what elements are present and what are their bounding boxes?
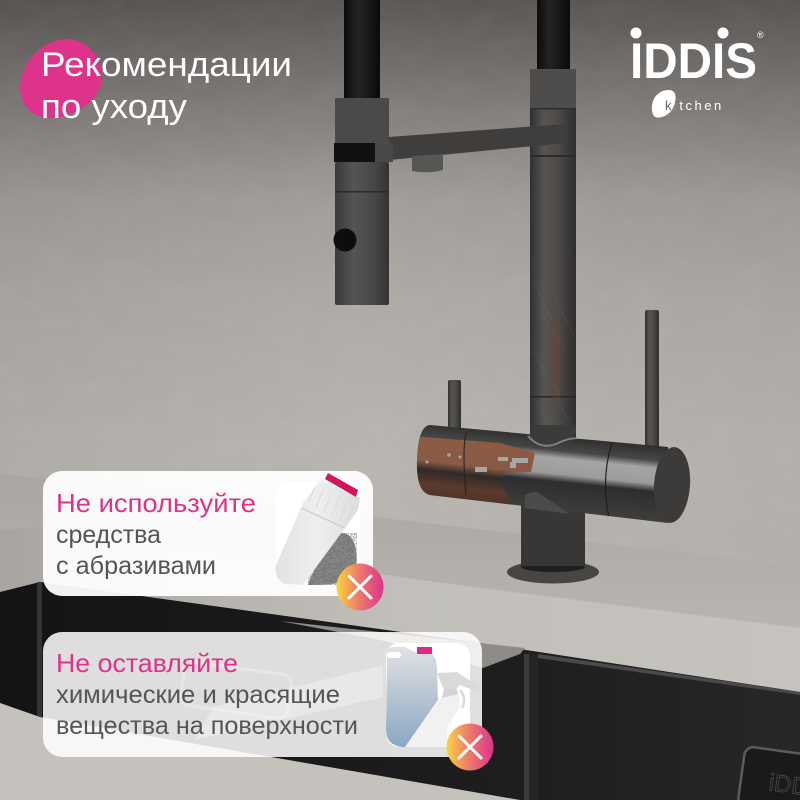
title: по уходу (41, 88, 187, 126)
sink corner highlight (37, 582, 42, 718)
card panel (43, 471, 373, 596)
product image: powder cleaner and steel wool (275, 473, 360, 585)
lower countertop (0, 703, 520, 800)
spray head hose (344, 0, 380, 99)
mixer body (416, 425, 668, 523)
tube joint (530, 425, 576, 447)
card heading: Не оставляйте (56, 648, 238, 678)
body end cap (651, 446, 693, 524)
aerator nozzle (412, 154, 443, 172)
base plate (507, 560, 599, 584)
image tile (386, 643, 470, 747)
faucet (334, 0, 693, 584)
card: chemicals warning (43, 632, 494, 770)
product image: canister and spray bottle (386, 643, 480, 747)
card reflection (195, 665, 383, 740)
wall (0, 0, 800, 600)
card text: средства (56, 521, 161, 549)
main hose (537, 0, 570, 70)
main column (530, 69, 576, 454)
card text: с абразивами (56, 552, 216, 580)
spray head (334, 98, 393, 305)
canister (386, 647, 438, 747)
card heading: Не используйте (56, 488, 256, 518)
card text: вещества на поверхности (56, 712, 358, 740)
title block (20, 39, 301, 126)
kitchen mark: kitchen (665, 98, 724, 113)
left lever (448, 380, 461, 432)
body lower joint (525, 492, 570, 514)
wordmark: ® (757, 30, 764, 40)
rust patch (410, 436, 535, 505)
logo: IDDIS kitchen (630, 28, 764, 118)
card text: химические и красящие (56, 681, 340, 709)
sink divider (524, 654, 538, 800)
cross badge (446, 724, 494, 770)
image tile (276, 482, 360, 585)
pedestal (521, 490, 585, 566)
wordmark: IDDIS (630, 33, 757, 89)
countertop front edge (0, 527, 800, 692)
cross badge (336, 564, 384, 610)
spray button (334, 228, 356, 252)
pink blob (20, 39, 102, 118)
right lever (645, 310, 659, 450)
spray bottle (405, 672, 480, 747)
title: Рекомендации (41, 46, 292, 84)
countertop surface (0, 474, 800, 632)
overflow left basin (179, 661, 293, 719)
steel wool (308, 533, 357, 585)
overflow right basin (737, 746, 800, 800)
connecting arm (389, 124, 565, 160)
sink basin (0, 582, 800, 800)
cleaner bottle (275, 473, 360, 585)
card panel (43, 632, 482, 757)
card: abrasives warning (43, 471, 384, 610)
